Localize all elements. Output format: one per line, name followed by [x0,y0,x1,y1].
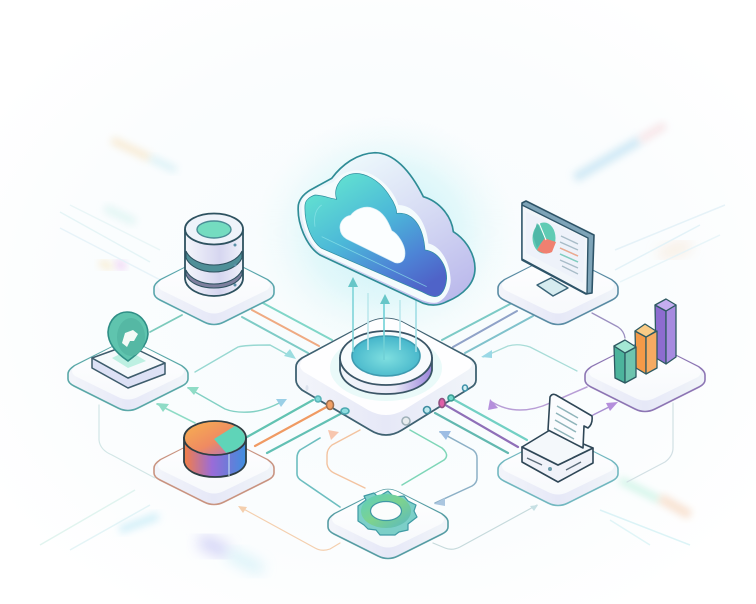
flow path: hub to gear teal [297,438,340,507]
central hub [296,318,476,435]
hub ring lens [352,336,420,376]
platform: database [154,256,274,324]
cloud inner contour [315,205,427,287]
connector lines [99,303,673,550]
cloud icon [298,153,475,305]
flow path: gear to printer [433,505,537,549]
hub ring glow [330,335,442,401]
infographic: cloud data hub network [40,122,726,578]
screen pie [532,222,556,254]
hub body [296,318,476,435]
cloud body [298,153,475,305]
platform: pie chart [154,436,274,504]
orange bar [635,331,646,374]
printed paper [548,394,592,448]
platform: gear [328,490,448,558]
pin to database link [150,315,182,332]
pie to hub links [247,400,344,453]
platform: monitor [498,256,618,324]
cloud face [305,174,447,297]
monitor to hub links [442,303,533,353]
flow path: hub to bars purple [492,387,587,410]
platform: bar chart [585,342,705,412]
flow path: blue gear link [435,432,477,503]
flow path: bars to hub [483,345,577,371]
flow path: pie to pin [157,404,195,423]
printer to hub links [435,398,527,453]
arrowheads [157,349,618,513]
teal bar [614,346,625,383]
gear icon [358,491,417,535]
platform: printer [498,436,618,506]
pin head [108,312,148,361]
teal pie slice [214,426,245,453]
flow path: pin to hub lower [188,388,283,412]
pin base box [92,358,165,388]
flow path: pin to pie [99,405,155,478]
monitor frame [522,201,594,294]
purple bar [655,305,666,364]
cloud front rim [301,170,451,303]
flow path: hub to gear orange [327,430,365,488]
monitor screen [526,212,585,283]
glow behind cloud [256,117,516,347]
flow path: gear to pie [240,507,340,550]
flow path: monitor to bars [592,313,625,338]
flow path: green gear link [402,430,447,485]
database icon [185,214,243,296]
printer body [522,447,593,482]
pie cylinder icon [184,421,250,477]
upward data arrows [348,277,416,360]
flow path: printer arrow [593,405,613,415]
printer icon [522,394,593,482]
location pin icon [92,312,165,388]
monitor icon [522,201,594,296]
hub ports [306,385,468,425]
platform: location pin [68,342,188,410]
monitor stand [537,278,568,296]
inner white cloud [340,207,405,263]
bar chart icon [614,299,676,383]
flow path: hub to pin [195,345,292,372]
hub top [300,318,472,415]
screen text lines [560,236,578,274]
decorative light streaks [40,125,725,570]
hub ring [340,358,432,394]
database to hub links [242,303,332,353]
flow path: printer to bars [627,403,673,482]
